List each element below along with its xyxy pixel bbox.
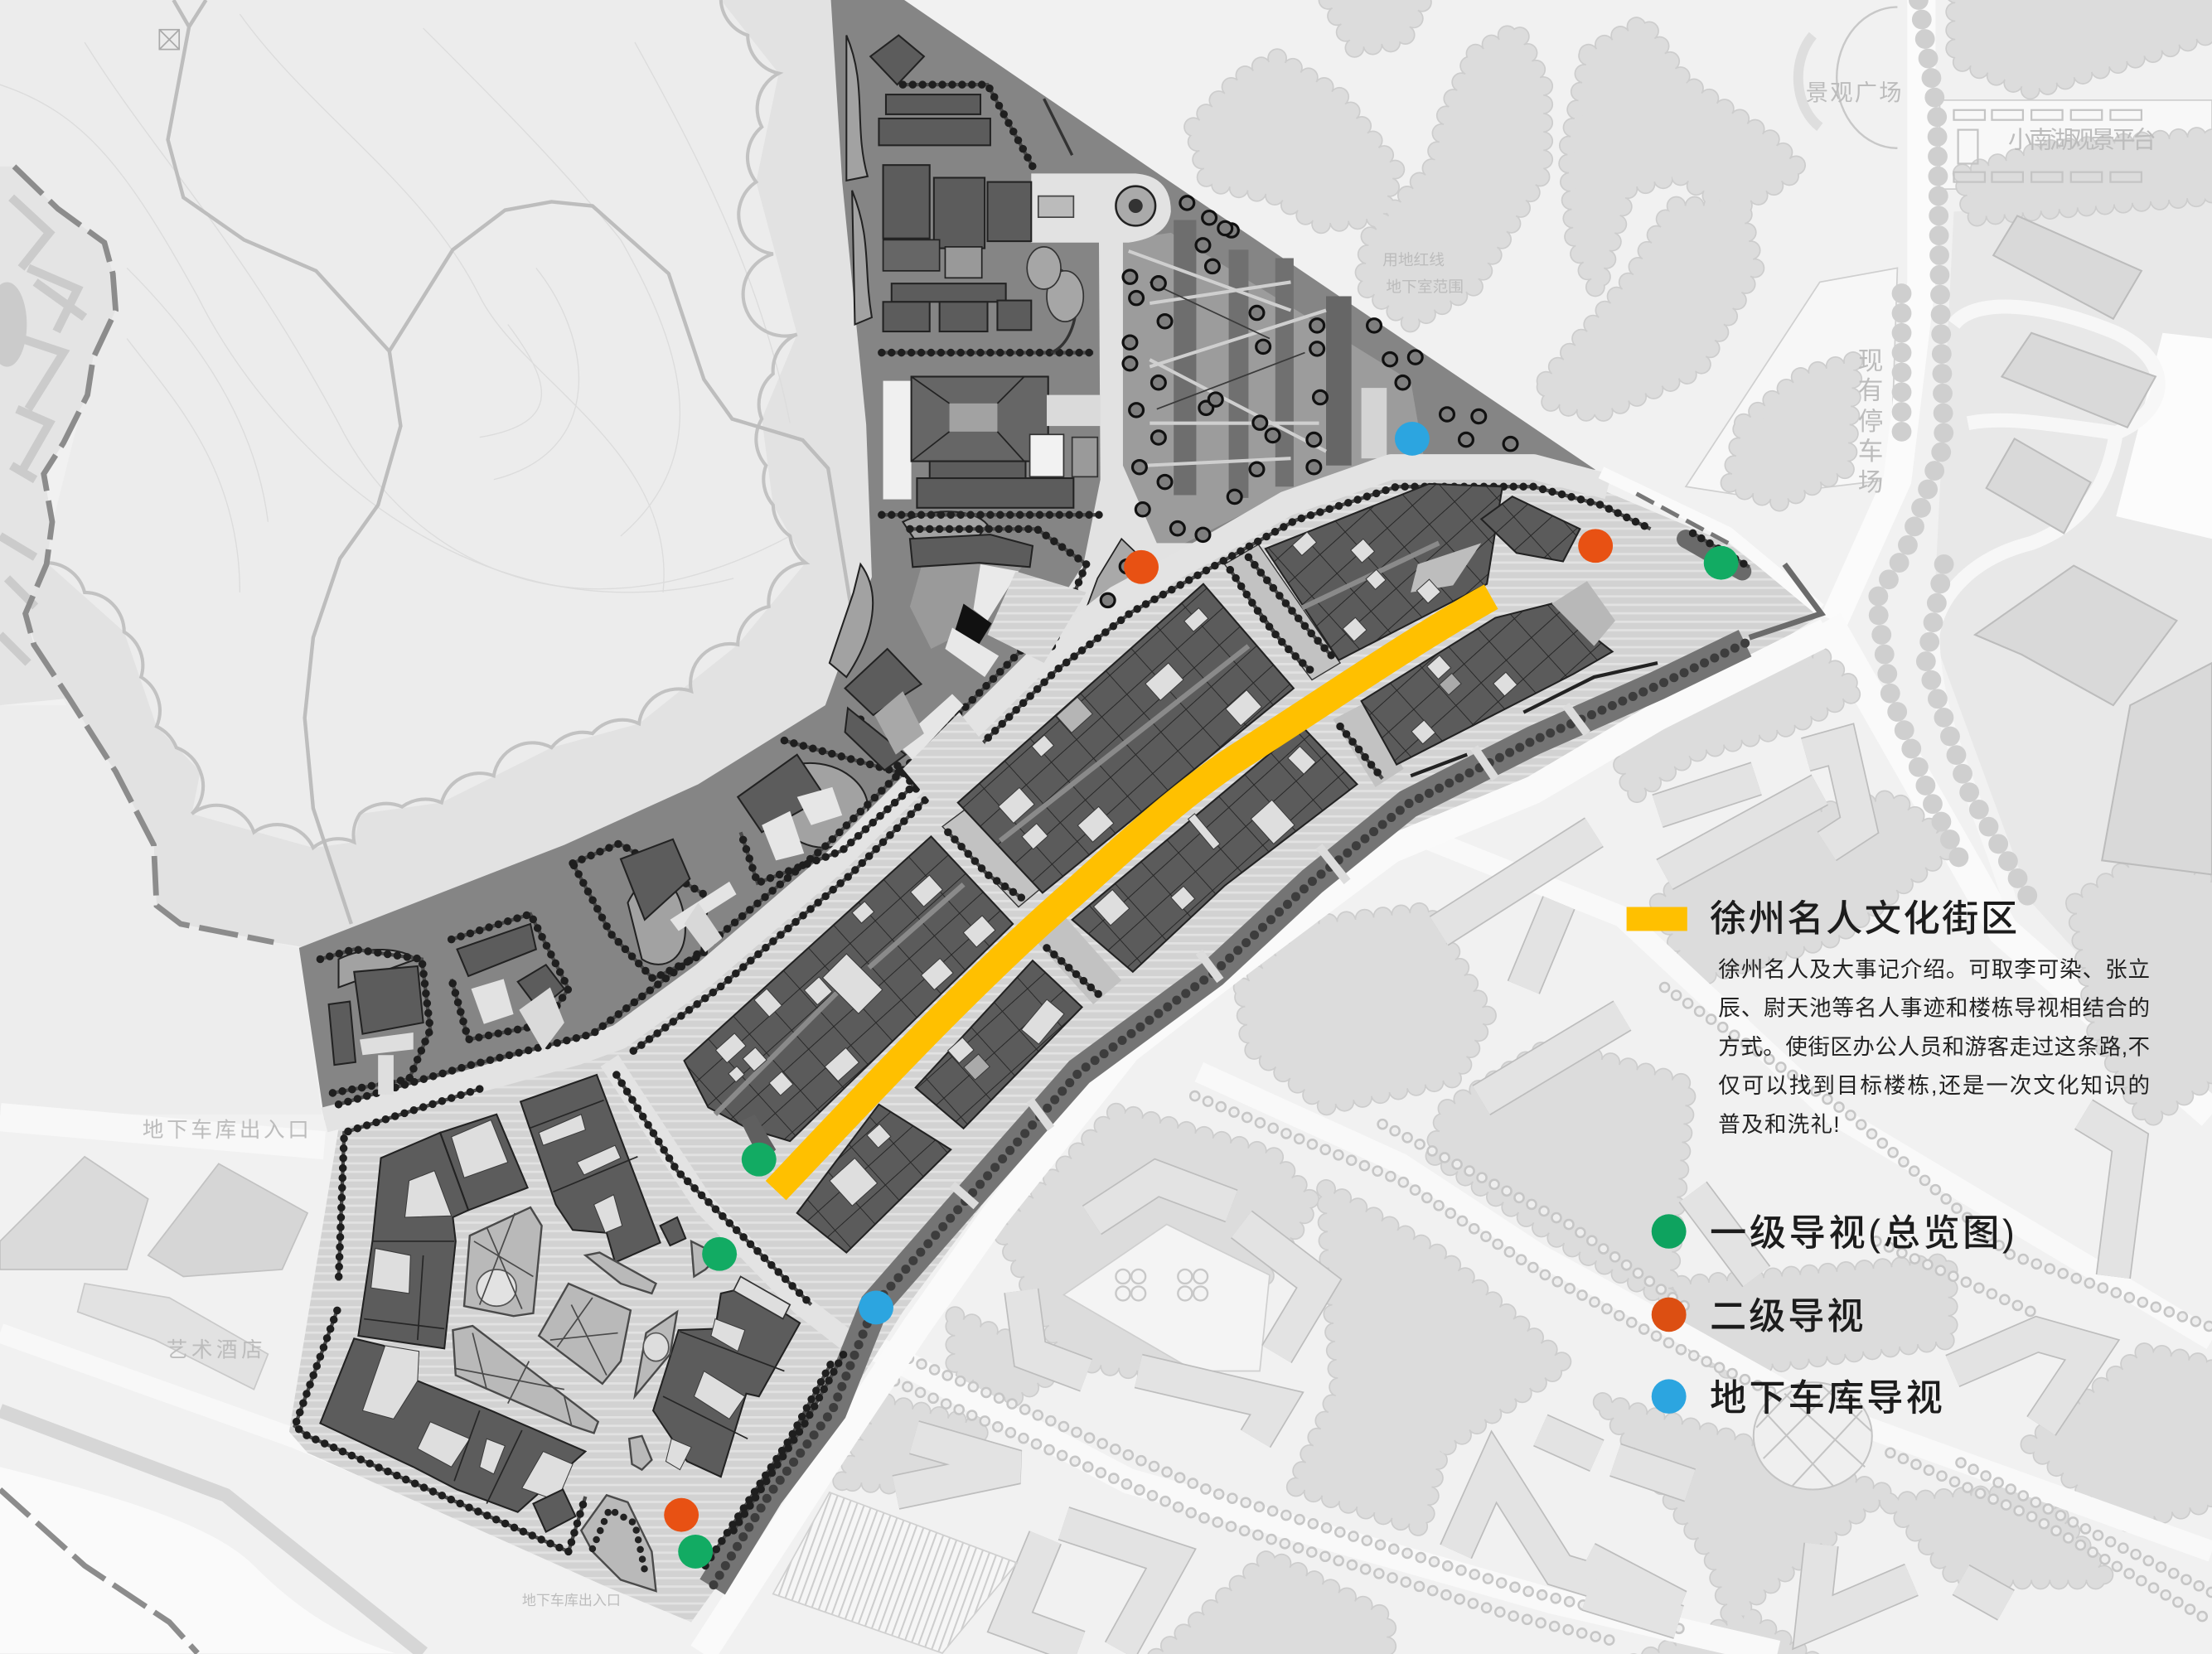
legend: street heading: 徐州名人文化街区 — [1710, 898, 2017, 939]
legend: underground garage: 地下车库导视 — [1710, 1378, 1943, 1419]
map label: boundary line: 用地红线 — [1382, 251, 1445, 268]
legend: level two: 二级导视 — [1710, 1296, 1864, 1337]
legend: street description — [1718, 957, 2150, 1137]
map label: landscape plaza: 景观广场 — [1806, 80, 1902, 105]
south-east branch road — [609, 1061, 846, 1340]
legend: street description: 仅可以找到目标楼栋,还是一次文化知识的 — [1718, 1073, 2150, 1098]
south arterial road — [703, 632, 1827, 1653]
roundabout — [1116, 186, 1155, 225]
tree canopies fill — [842, 0, 2212, 1654]
famous-person cultural street highlight — [776, 597, 1491, 1191]
east neighbourhood tone — [1933, 197, 2212, 1100]
map label: art hotel: 艺术酒店 — [167, 1339, 263, 1362]
map label: underground garage: 地下车库出入口 — [143, 1119, 309, 1142]
map label: existing parking: 现 — [1858, 347, 1883, 375]
map label: existing parking: 停 — [1858, 408, 1883, 436]
landscape plaza circle — [1798, 7, 1897, 148]
lattice circular plaza — [1754, 1382, 1872, 1490]
central gardens — [942, 539, 1742, 1004]
courtyard tree clusters — [1116, 1270, 1208, 1300]
south plot buildings — [320, 1075, 800, 1532]
grid paving — [1038, 196, 1073, 217]
legend: street description: 普及和洗礼! — [1718, 1112, 1840, 1137]
west residential area — [0, 167, 677, 1653]
map label: existing parking: 车 — [1858, 438, 1883, 466]
south-east tree rows: ring centres — [882, 988, 2212, 1643]
map label: boundary line: 地下室范围 — [1386, 278, 1464, 295]
upper row building blocks — [685, 484, 1580, 1163]
east pitched-roof buildings — [1975, 215, 2212, 874]
tree canopies outline — [842, 0, 2212, 1654]
east thin road edge — [1601, 472, 1821, 637]
legend: street swatch — [1627, 907, 1687, 931]
north garden — [1121, 220, 1425, 543]
residential courtyard — [1063, 1225, 1270, 1371]
markers: level two wayfinding — [664, 529, 1613, 1532]
east tree rows — [1876, 0, 2031, 902]
legend: street description: 辰、尉天池等名人事迹和楼栋导视相结合的 — [1718, 996, 2150, 1021]
hill area — [0, 0, 872, 948]
east zone: white arterial corridors and parking wedge — [1467, 0, 2212, 1115]
north garden trees — [1101, 196, 1517, 607]
legend: street description: 徐州名人及大事记介绍。可取李可染、张立 — [1718, 957, 2150, 982]
south-east tree rows: ring outlines — [882, 988, 2212, 1643]
site: north and north-west plots — [299, 0, 1595, 1120]
map label: existing parking: 有 — [1858, 377, 1883, 405]
plaza and north-south road — [1019, 173, 1227, 679]
legend: level one: 一级导视(总览图) — [1710, 1213, 2015, 1254]
traffic island — [1079, 539, 1158, 635]
map label: existing parking: 场 — [1858, 468, 1883, 496]
north-west plot buildings — [329, 534, 1087, 1095]
map label: boundary line — [1382, 251, 1464, 295]
viewing platform grid — [1954, 110, 2142, 182]
main curved road — [324, 467, 1608, 1120]
legend: street description: 方式。使街区办公人员和游客走过这条路,不 — [1718, 1034, 2150, 1059]
markers: level one wayfinding — [678, 546, 1739, 1569]
site boundary dashed line — [0, 167, 273, 1653]
south plot planters — [453, 1207, 719, 1591]
surface parking lot — [773, 1492, 1017, 1653]
building courtyards — [716, 532, 1517, 1206]
site: central and south plots — [289, 467, 1821, 1623]
south-east roads — [846, 832, 2212, 1653]
hill base tone — [0, 0, 872, 948]
map label: garage near south plot: 地下车库出入口 — [522, 1593, 621, 1608]
hedge trees — [295, 85, 1750, 1565]
map label: existing parking — [1858, 347, 1883, 496]
south hedge strip — [713, 643, 1745, 1587]
neighbouring buildings outline — [28, 745, 2130, 1651]
north temple complex — [870, 36, 1101, 508]
map label: viewing platform: 小南湖观景平台 — [2008, 128, 2156, 154]
north-west planting beds — [339, 36, 988, 988]
neighbouring buildings fill — [28, 745, 2130, 1651]
markers: underground garage wayfinding — [859, 422, 1430, 1324]
lower row building blocks — [797, 581, 1615, 1253]
hedge underlay — [295, 85, 1750, 1565]
